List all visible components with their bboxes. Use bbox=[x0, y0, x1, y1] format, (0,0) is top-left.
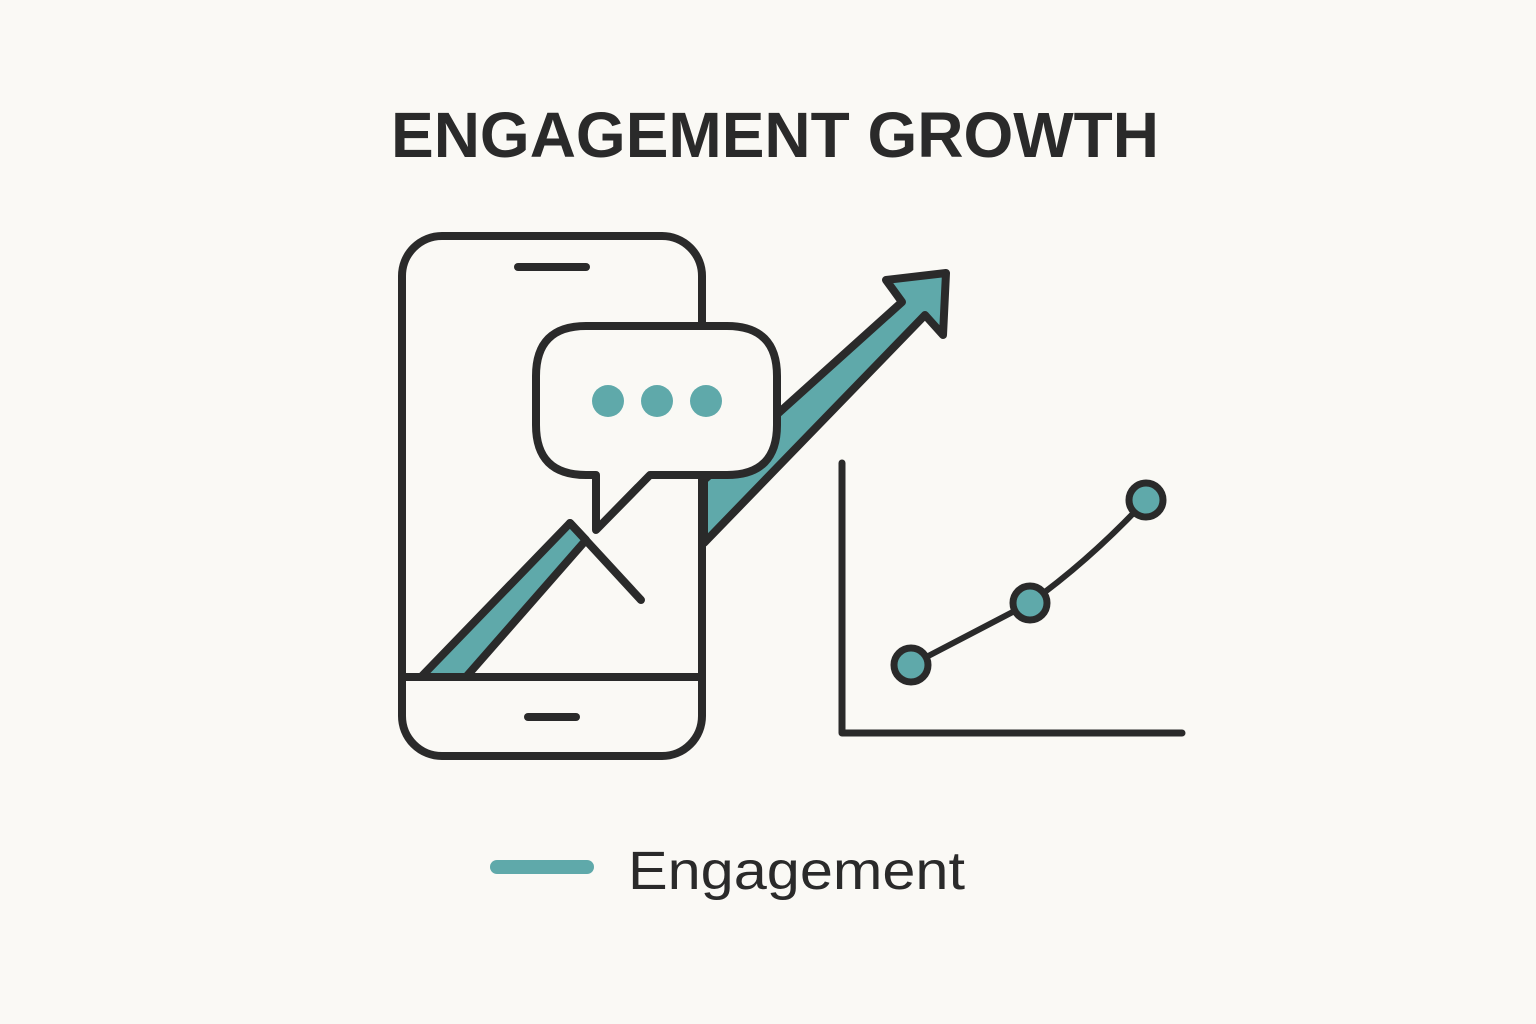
line chart bbox=[842, 463, 1182, 733]
speech bubble bbox=[536, 326, 777, 530]
phone bbox=[402, 236, 702, 756]
title: ENGAGEMENT GROWTH bbox=[391, 99, 1159, 171]
legend: Engagement bbox=[628, 841, 965, 901]
arrow: inside phone part bbox=[421, 523, 641, 677]
arrow: outside part bbox=[704, 273, 946, 543]
